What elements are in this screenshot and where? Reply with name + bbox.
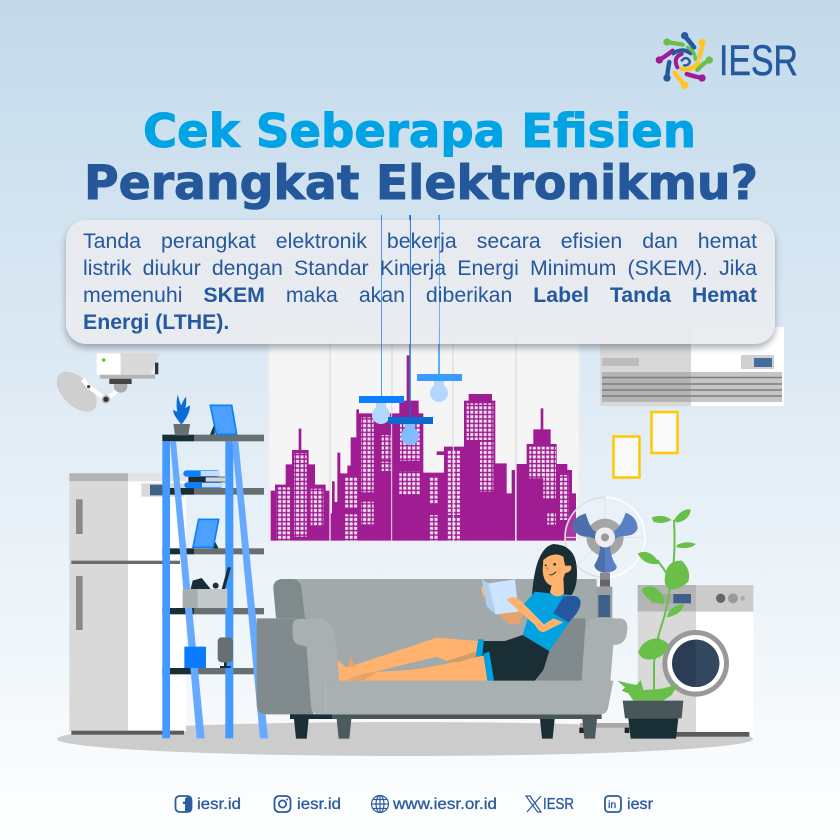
body line 3: memenuhi SKEM maka akan diberikan Label Tanda Hemat bbox=[83, 283, 757, 307]
linkedin bbox=[605, 796, 654, 813]
green plant in pot bbox=[617, 509, 696, 739]
footer social links bbox=[176, 796, 654, 813]
torso and arms bbox=[481, 579, 581, 651]
stacked books bbox=[183, 470, 225, 488]
storage box with tools bbox=[183, 567, 231, 608]
body line 4: Energi (LTHE). bbox=[83, 310, 229, 334]
facebook: iesr.id bbox=[197, 796, 241, 813]
instagram bbox=[274, 796, 341, 813]
legs bbox=[337, 638, 488, 681]
shelves bbox=[162, 435, 264, 674]
air conditioner bbox=[600, 327, 784, 406]
floor shadow bbox=[57, 722, 753, 756]
title line 1: Cek Seberapa Efisien bbox=[143, 104, 696, 158]
title line 2: Perangkat Elektronikmu? bbox=[84, 156, 758, 211]
logo mark bbox=[656, 32, 713, 89]
IESR logo bbox=[656, 32, 798, 89]
linkedin: in bbox=[608, 799, 616, 811]
hair bbox=[531, 544, 577, 611]
security camera bbox=[49, 353, 160, 419]
ladder frame bbox=[162, 441, 268, 738]
title bbox=[84, 104, 758, 211]
photo frame top shelf bbox=[210, 405, 237, 435]
washing machine bbox=[638, 585, 753, 737]
blue box and speaker bbox=[184, 637, 233, 668]
left furniture group bbox=[49, 353, 268, 738]
yellow picture frames bbox=[614, 412, 678, 478]
body line 2: listrik diukur dengan Standar Kinerja Energi Minimum (SKEM). Jika bbox=[83, 256, 757, 280]
instagram: iesr.id bbox=[297, 796, 341, 813]
potted plant on shelf bbox=[173, 395, 190, 435]
hanging lamps bbox=[359, 215, 462, 445]
facebook bbox=[176, 796, 241, 813]
window blinds bbox=[268, 328, 580, 542]
tablet on shelf bbox=[193, 519, 219, 548]
sofa bbox=[257, 579, 627, 739]
face bbox=[543, 554, 571, 596]
body line 1: Tanda perangkat elektronik bekerja secara efisien dan hemat bbox=[83, 229, 757, 253]
logo wordmark: IESR bbox=[719, 37, 798, 85]
x: IESR bbox=[543, 796, 574, 813]
website: www.iesr.or.id bbox=[392, 796, 497, 813]
intro text panel bbox=[66, 220, 775, 344]
x bbox=[526, 796, 574, 813]
linkedin: iesr bbox=[627, 796, 654, 813]
standing fan bbox=[565, 497, 645, 733]
refrigerator bbox=[69, 473, 186, 735]
city skyline bbox=[271, 355, 576, 542]
shorts bbox=[476, 635, 549, 681]
woman reading bbox=[337, 544, 581, 681]
